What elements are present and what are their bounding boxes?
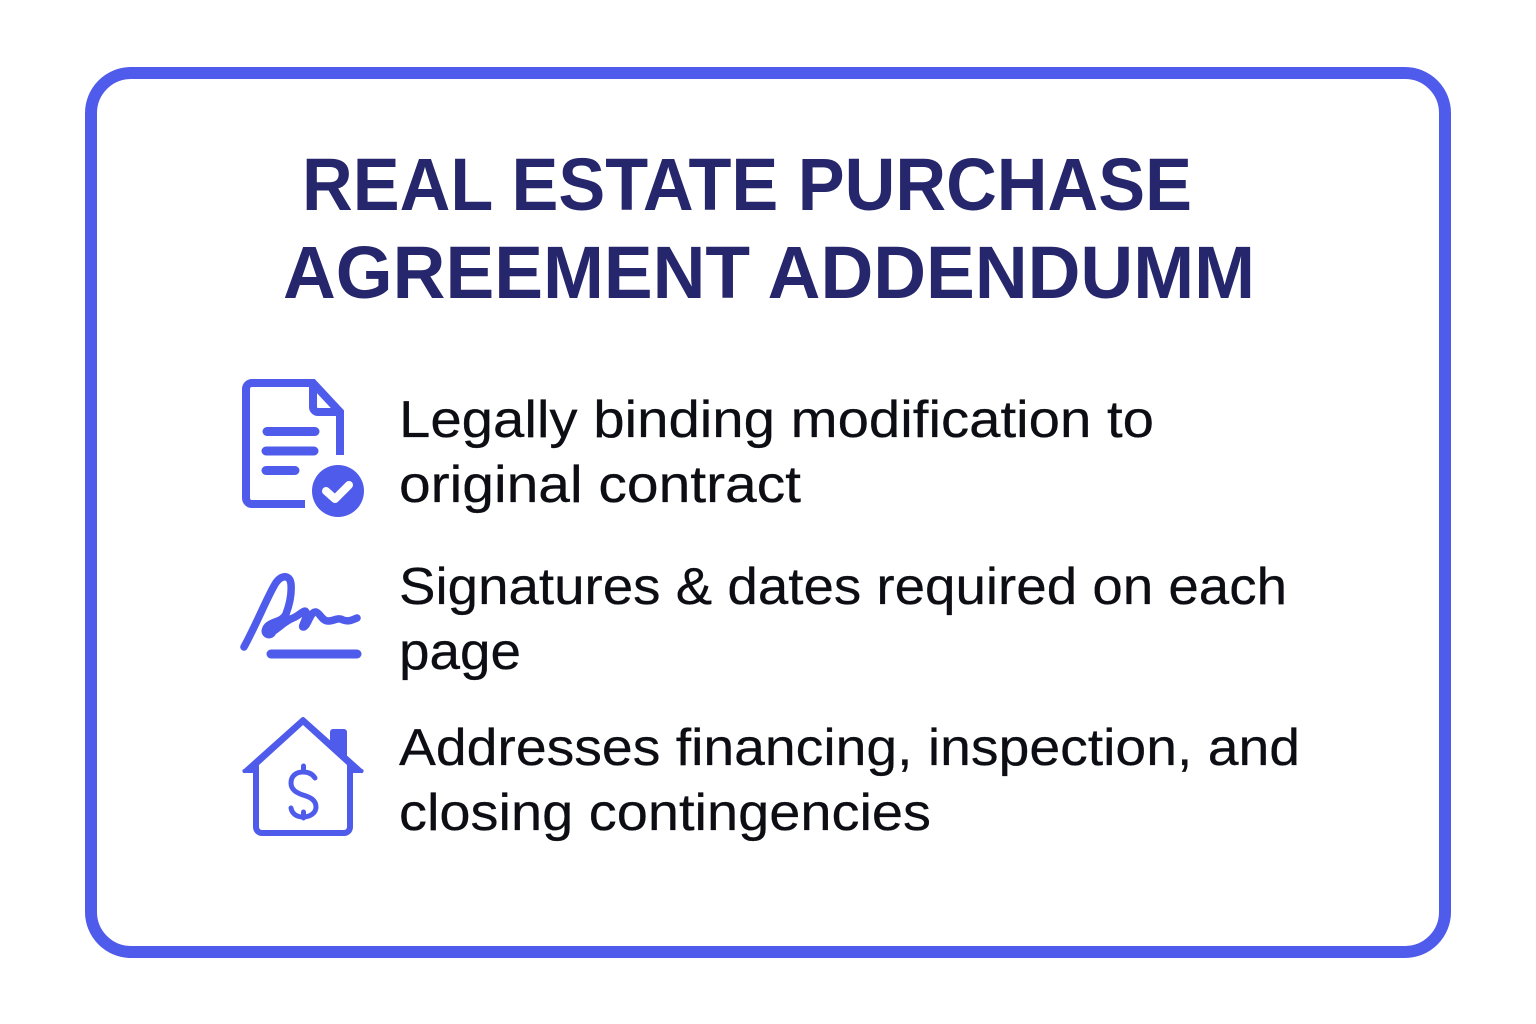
text: addresses contingencies: Addresses financing, inspection, and [399,719,1300,777]
title: REAL ESTATE PURCHASE [302,143,1192,226]
text: signatures and dates: page [399,623,521,681]
icon: house with dollar sign [242,717,364,836]
text: signatures and dates [399,558,1287,681]
text: legally binding modification: Legally binding modification to [399,391,1154,449]
icon: document with check mark [246,383,368,521]
icon: signature [244,577,357,654]
text: legally binding modification: original contract [399,456,802,514]
title: AGREEMENT ADDENDUMM [283,231,1255,314]
title [283,143,1255,314]
text: addresses contingencies [399,719,1300,842]
panel: rounded card border [91,73,1445,952]
text: signatures and dates: Signatures & dates required on each [399,558,1287,616]
text: addresses contingencies: closing contingencies [399,784,931,842]
text: legally binding modification [399,391,1154,514]
